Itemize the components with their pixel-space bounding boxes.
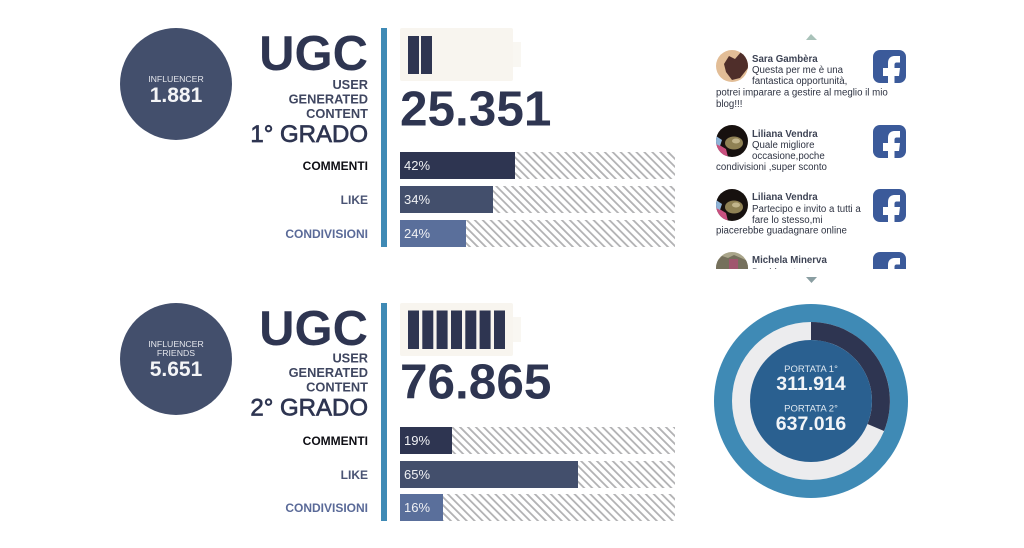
bar labels xyxy=(285,434,368,515)
section: UGC second degree xyxy=(120,302,675,521)
bar labels: LIKE xyxy=(341,193,368,207)
bar chart xyxy=(400,152,675,247)
comment 3: piacerebbe guadagnare online xyxy=(716,226,847,236)
bar chart: 42% xyxy=(404,158,430,173)
comment 3 xyxy=(716,189,906,236)
heading: UGC: UGC xyxy=(259,27,368,81)
section: UGC first degree xyxy=(120,27,675,247)
icon: battery xyxy=(400,303,521,356)
bar labels: CONDIVISIONI xyxy=(285,227,368,241)
comment 1: Questa per me è una xyxy=(752,65,844,76)
comment 4: Michela Minerva xyxy=(752,255,827,266)
arrow up xyxy=(806,34,817,40)
comment 2: Liliana Vendra xyxy=(752,129,818,140)
comment 2 xyxy=(716,125,906,173)
subtitle: user generated content xyxy=(289,350,368,394)
divider bar xyxy=(381,28,387,247)
bar labels: COMMENTI xyxy=(303,159,368,173)
subtitle: user generated content: CONTENT xyxy=(306,380,368,394)
bar labels: CONDIVISIONI xyxy=(285,501,368,515)
comment 1: fantastica opportunità, xyxy=(752,76,847,87)
donut chart: reach: PORTATA 2° xyxy=(784,404,838,414)
subtitle: user generated content xyxy=(289,77,368,121)
influencer friends circle: FRIENDS xyxy=(157,348,195,358)
bar chart: 24% xyxy=(404,226,430,241)
donut chart: reach: 311.914 xyxy=(776,373,846,395)
comment 3: fare lo stesso,mi xyxy=(752,215,823,226)
influencer circle: INFLUENCER xyxy=(148,74,204,84)
donut chart: reach xyxy=(714,304,908,498)
comment 2: condivisioni ,super sconto xyxy=(716,162,827,173)
influencer circle xyxy=(120,28,232,140)
subtitle: user generated content: CONTENT xyxy=(306,106,368,121)
comment 1: potrei imparare a gestire al meglio il mio xyxy=(716,88,888,98)
comment 3: Partecipo e invito a tutti a xyxy=(752,204,861,215)
influencer friends circle xyxy=(120,303,232,415)
comment 3: Liliana Vendra xyxy=(752,192,818,203)
panel: comments feed xyxy=(716,34,906,285)
influencer circle: 1.881 xyxy=(150,84,203,107)
bar chart: 19% xyxy=(404,433,430,448)
bar labels xyxy=(285,159,368,241)
subtitle: user generated content: USER xyxy=(332,350,368,366)
subtitle: user generated content: GENERATED xyxy=(289,365,368,380)
bar labels: COMMENTI xyxy=(303,434,368,448)
bar labels: LIKE xyxy=(341,468,368,482)
comment 1: Sara Gambèra xyxy=(752,54,818,65)
influencer friends circle: INFLUENCER xyxy=(148,339,204,349)
comment 4: Desidero tanto xyxy=(752,268,815,278)
comment 2: occasione,poche xyxy=(752,151,825,162)
bar chart: 16% xyxy=(404,500,430,515)
heading: UGC: UGC xyxy=(259,302,368,356)
grade label: 1° GRADO xyxy=(250,121,368,148)
total value: 25.351 xyxy=(400,82,551,136)
donut chart: reach: 637.016 xyxy=(776,413,846,435)
comment 1: blog!!! xyxy=(716,99,742,110)
influencer friends circle: 5.651 xyxy=(150,358,203,381)
bar chart: 34% xyxy=(404,192,430,207)
bar chart: 65% xyxy=(404,467,430,482)
icon: battery xyxy=(400,28,521,81)
comment 2: Quale migliore xyxy=(752,140,814,151)
bar chart xyxy=(400,427,675,521)
total value: 76.865 xyxy=(400,354,551,410)
donut chart: reach: PORTATA 1° xyxy=(784,364,838,375)
comment 4 xyxy=(716,252,906,269)
arrow down xyxy=(806,277,817,283)
subtitle: user generated content: USER xyxy=(332,77,368,92)
grade label: 2° GRADO xyxy=(250,394,368,422)
comment 1 xyxy=(716,50,906,110)
divider bar xyxy=(381,303,387,521)
subtitle: user generated content: GENERATED xyxy=(289,92,368,106)
